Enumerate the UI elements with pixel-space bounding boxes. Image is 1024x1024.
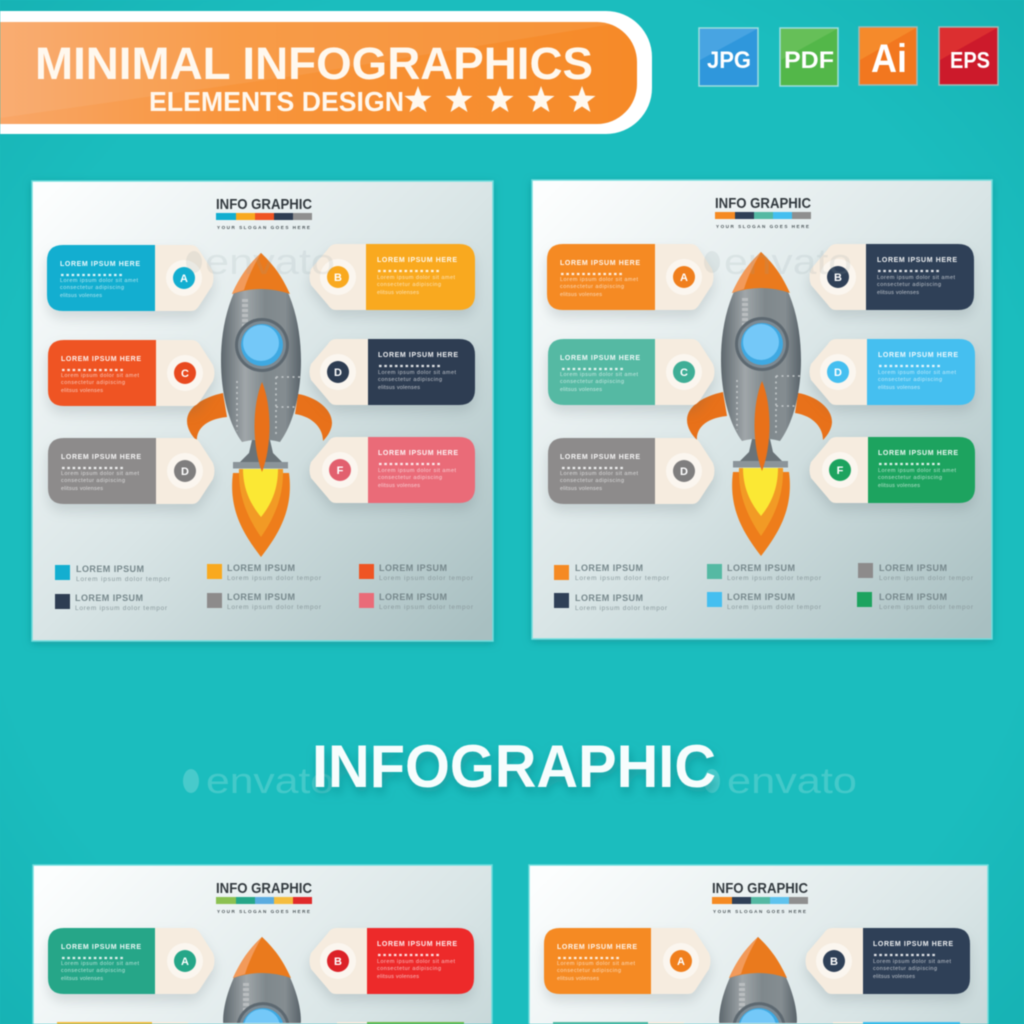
card B: B (334, 272, 342, 284)
card A (47, 245, 214, 311)
panel 2: orange navy scheme (532, 180, 992, 639)
rocket (187, 253, 332, 557)
legend: Lorem ipsum dolor tempor (227, 604, 322, 611)
next row card tops (553, 1022, 960, 1024)
panel 4 heading: YOUR SLOGAN GOES HERE (713, 909, 806, 914)
card D grey: LOREM IPSUM HERE (560, 454, 640, 461)
panel 1 heading: YOUR SLOGAN GOES HERE (217, 225, 310, 230)
card B: LOREM IPSUM HERE (877, 257, 957, 264)
card F: LOREM IPSUM HERE (878, 450, 958, 457)
legend: LOREM IPSUM (727, 592, 795, 602)
card D grey: Lorem ipsum dolor sit amet (61, 471, 139, 477)
card D (310, 339, 475, 405)
legend: LOREM IPSUM (227, 592, 295, 602)
card D grey (48, 438, 214, 504)
card D: consectetur adipiscing (378, 377, 442, 383)
legend: Lorem ipsum dolor tempor (76, 576, 171, 583)
card C: C (181, 368, 189, 380)
card D: D (834, 367, 842, 379)
card D grey (548, 438, 714, 504)
card B: elitsus volenses (873, 974, 915, 980)
card A (48, 928, 214, 994)
card A: A (181, 956, 189, 968)
card D grey: consectetur adipiscing (61, 478, 125, 484)
panel 3 heading: INFO GRAPHIC (216, 880, 312, 897)
watermark: bottom left: envato (206, 760, 334, 801)
card A: elitsus volenses (560, 292, 602, 298)
legend: Lorem ipsum dolor tempor (75, 605, 168, 612)
card D: LOREM IPSUM HERE (378, 352, 458, 359)
legend: LOREM IPSUM (879, 563, 947, 573)
next row card tops (57, 1022, 464, 1024)
card A: A (677, 956, 685, 968)
legend: Lorem ipsum dolor tempor (379, 604, 474, 611)
card F: elitsus volenses (378, 483, 420, 489)
badge: PDF (780, 28, 838, 86)
card B: consectetur adipiscing (873, 966, 937, 972)
card D grey: D (181, 466, 189, 478)
badge: PDF: PDF (784, 47, 834, 74)
card C: consectetur adipiscing (560, 379, 624, 385)
card A: A (680, 272, 688, 284)
card A (547, 244, 714, 310)
card F (810, 437, 975, 503)
panel 3 heading (216, 880, 312, 914)
legend: Lorem ipsum dolor tempor (727, 604, 822, 611)
card A: LOREM IPSUM HERE (557, 944, 637, 951)
card D grey: D (680, 466, 688, 478)
card F: LOREM IPSUM HERE (378, 450, 458, 457)
card D: consectetur adipiscing (878, 377, 942, 383)
card A: consectetur adipiscing (560, 284, 624, 290)
legend: Lorem ipsum dolor tempor (575, 605, 668, 612)
watermark: panel 1: envato (205, 241, 335, 282)
panel 2 heading (715, 195, 811, 229)
card A: Lorem ipsum dolor sit amet (557, 961, 635, 967)
panel 2 heading: INFO GRAPHIC (715, 195, 811, 212)
card B (310, 244, 475, 310)
card D grey: consectetur adipiscing (560, 478, 624, 484)
legend: LOREM IPSUM (75, 593, 143, 603)
header subtitle: ELEMENTS DESIGN (149, 86, 404, 117)
card A: consectetur adipiscing (61, 968, 125, 974)
card F: elitsus volenses (878, 483, 920, 489)
panel 3 heading: YOUR SLOGAN GOES HERE (217, 909, 310, 914)
rocket cropped (223, 937, 301, 1023)
card A: Lorem ipsum dolor sit amet (61, 961, 139, 967)
card B: elitsus volenses (877, 290, 919, 296)
legend: Lorem ipsum dolor tempor (227, 575, 322, 582)
card B: consectetur adipiscing (377, 966, 441, 972)
card B: consectetur adipiscing (377, 282, 441, 288)
card B: elitsus volenses (377, 290, 419, 296)
watermark: panel 2: envato (724, 241, 852, 282)
card F: consectetur adipiscing (878, 475, 942, 481)
panel 1 heading (216, 196, 312, 230)
section title: INFOGRAPHIC (312, 733, 716, 800)
rocket (687, 252, 832, 556)
card F: Lorem ipsum dolor sit amet (878, 468, 956, 474)
card D grey: elitsus volenses (61, 486, 103, 492)
legend (55, 563, 474, 612)
five star rating (404, 86, 596, 112)
card B (810, 244, 974, 310)
card D grey: LOREM IPSUM HERE (61, 454, 141, 461)
card C: Lorem ipsum dolor sit amet (560, 372, 638, 378)
badge: Ai (859, 27, 917, 85)
card B: LOREM IPSUM HERE (873, 941, 953, 948)
card B: Lorem ipsum dolor sit amet (377, 275, 455, 281)
card F: F (837, 465, 844, 477)
badge: EPS: EPS (950, 47, 990, 73)
card B: Lorem ipsum dolor sit amet (873, 959, 951, 965)
badge: JPG (699, 28, 758, 86)
card D: LOREM IPSUM HERE (878, 352, 958, 359)
panel 4 heading (712, 880, 808, 914)
card C: Lorem ipsum dolor sit amet (61, 373, 139, 379)
card F (310, 437, 475, 503)
card A: elitsus volenses (61, 976, 103, 982)
card B: Lorem ipsum dolor sit amet (377, 959, 455, 965)
card F: consectetur adipiscing (378, 475, 442, 481)
legend (554, 563, 974, 612)
panel 4 heading: INFO GRAPHIC (712, 880, 808, 897)
card D grey: elitsus volenses (560, 486, 602, 492)
legend: LOREM IPSUM (227, 563, 295, 573)
badge: JPG: JPG (707, 47, 751, 74)
card A (544, 928, 710, 994)
panel 4: orange navy scheme (cropped) (529, 865, 988, 1024)
legend: Lorem ipsum dolor tempor (575, 575, 670, 582)
legend: Lorem ipsum dolor tempor (727, 575, 822, 582)
card F: Lorem ipsum dolor sit amet (378, 468, 456, 474)
legend: LOREM IPSUM (379, 592, 447, 602)
card A: consectetur adipiscing (60, 285, 124, 291)
card A: LOREM IPSUM HERE (60, 261, 140, 268)
legend: LOREM IPSUM (575, 563, 643, 573)
card B: LOREM IPSUM HERE (377, 257, 457, 264)
badge: EPS (939, 27, 998, 85)
card A: Lorem ipsum dolor sit amet (560, 277, 638, 283)
card B: B (834, 272, 842, 284)
card A: LOREM IPSUM HERE (61, 944, 141, 951)
card A: elitsus volenses (557, 976, 599, 982)
card C: LOREM IPSUM HERE (560, 355, 640, 362)
card A: consectetur adipiscing (557, 968, 621, 974)
card D: Lorem ipsum dolor sit amet (878, 370, 956, 376)
card B (310, 928, 474, 994)
card A: Lorem ipsum dolor sit amet (60, 278, 138, 284)
card F: F (337, 465, 344, 477)
card B: B (830, 956, 838, 968)
card B: elitsus volenses (377, 974, 419, 980)
card C: C (680, 367, 688, 379)
card C: elitsus volenses (560, 387, 602, 393)
panel 1: blue orange scheme (32, 181, 493, 641)
panel 2 heading: YOUR SLOGAN GOES HERE (716, 224, 809, 229)
header banner (0, 11, 652, 134)
header title: MINIMAL INFOGRAPHICS (35, 38, 593, 89)
legend: LOREM IPSUM (76, 564, 144, 574)
card A: elitsus volenses (60, 293, 102, 299)
card D: D (334, 367, 342, 379)
card C (48, 340, 214, 406)
legend: LOREM IPSUM (575, 593, 643, 603)
card D: elitsus volenses (878, 385, 920, 391)
card C: consectetur adipiscing (61, 380, 125, 386)
legend: LOREM IPSUM (727, 563, 795, 573)
rocket cropped (719, 937, 797, 1023)
legend: Lorem ipsum dolor tempor (879, 604, 974, 611)
card B: consectetur adipiscing (877, 282, 941, 288)
watermark: bottom right: envato (727, 760, 857, 801)
panel 1 heading: INFO GRAPHIC (216, 196, 312, 213)
card B: B (334, 956, 342, 968)
card D: Lorem ipsum dolor sit amet (378, 370, 456, 376)
card C: LOREM IPSUM HERE (61, 356, 141, 363)
card D (810, 339, 975, 405)
panel 3: green red scheme (cropped) (33, 865, 492, 1024)
card D: elitsus volenses (378, 385, 420, 391)
card A: A (180, 273, 188, 285)
card B (806, 928, 970, 994)
legend: LOREM IPSUM (379, 563, 447, 573)
card B: Lorem ipsum dolor sit amet (877, 275, 955, 281)
badge: Ai: Ai (871, 37, 907, 81)
card D grey: Lorem ipsum dolor sit amet (560, 471, 638, 477)
legend: Lorem ipsum dolor tempor (879, 575, 974, 582)
legend: Lorem ipsum dolor tempor (379, 575, 474, 582)
legend: LOREM IPSUM (879, 592, 947, 602)
card A: LOREM IPSUM HERE (560, 260, 640, 267)
card B: LOREM IPSUM HERE (377, 941, 457, 948)
card C: elitsus volenses (61, 388, 103, 394)
card C (548, 339, 714, 405)
